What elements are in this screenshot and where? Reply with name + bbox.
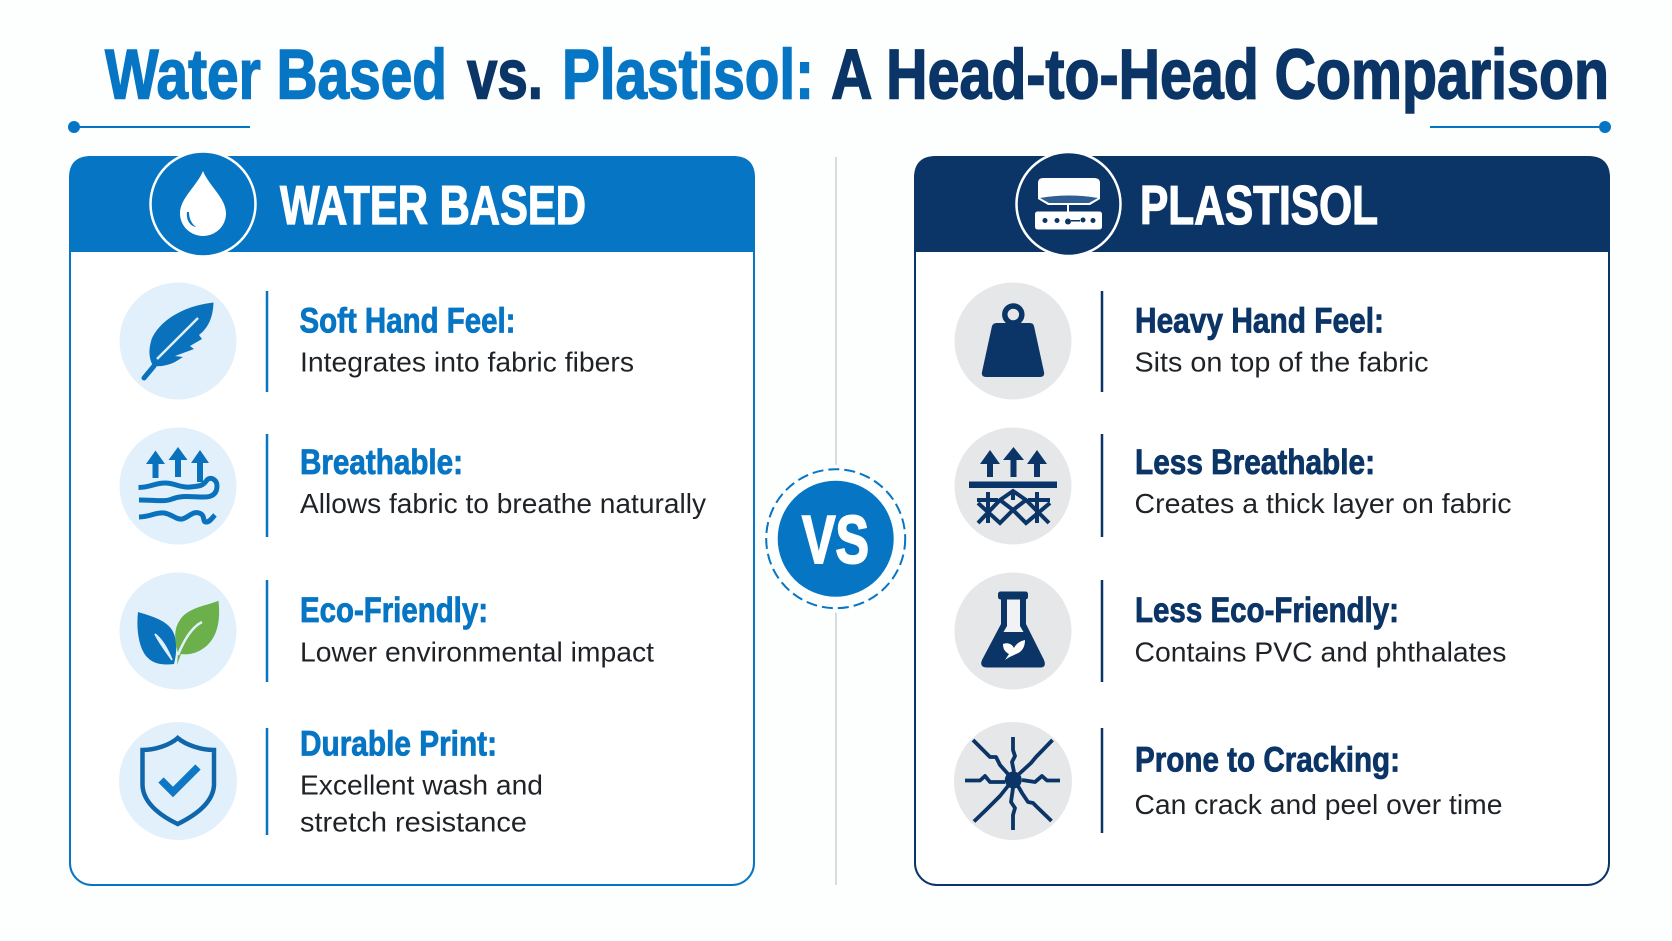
panel: plastisol: [914, 152, 1610, 885]
icon: weight: [982, 306, 1044, 377]
text: durable print: Durable Print:: [300, 725, 497, 764]
text: breathable: [300, 443, 706, 519]
icon: blocked breathing mesh: [969, 447, 1057, 523]
text: heavy hand feel: Sits on top of the fabric: [1134, 347, 1429, 378]
row: less eco-friendly: [954, 572, 1506, 690]
text: durable print: stretch resistance: [300, 807, 527, 838]
title: vs.: [467, 34, 543, 114]
header: plastisol: PLASTISOL: [1140, 174, 1378, 236]
icon: water drop: [180, 171, 226, 236]
row: eco-friendly: [120, 572, 654, 690]
vs badge: [762, 465, 910, 613]
row: durable print: [119, 722, 543, 840]
text: soft hand feel: [300, 302, 634, 378]
title rule right: [1430, 121, 1611, 133]
icon: shield check: [142, 738, 214, 824]
text: less eco-friendly: Contains PVC and phthalates: [1134, 637, 1506, 668]
text: eco-friendly: Lower environmental impact: [300, 637, 654, 668]
header: water based: WATER BASED: [280, 174, 586, 236]
title: [105, 34, 1609, 114]
text: durable print: Excellent wash and: [300, 770, 543, 801]
text: prone to cracking: [1134, 741, 1502, 820]
icon: breathable waves: [138, 447, 217, 522]
icon: feather: [144, 302, 214, 378]
header: plastisol: [914, 152, 1610, 256]
text: heavy hand feel: [1134, 302, 1429, 378]
panel: water based: [69, 152, 755, 885]
icon: flask: [981, 592, 1045, 668]
text: less breathable: Creates a thick layer on fabric: [1134, 488, 1512, 519]
icon: leaves: [137, 601, 219, 665]
row: less breathable: [954, 428, 1512, 544]
row: soft hand feel: [120, 282, 634, 400]
text: soft hand feel: Integrates into fabric fibers: [300, 347, 634, 378]
row: breathable: [120, 428, 706, 544]
text: less eco-friendly: [1134, 591, 1506, 668]
icon: screen printer: [1035, 178, 1102, 230]
text: eco-friendly: Eco-Friendly:: [300, 591, 488, 630]
text: less breathable: [1134, 443, 1512, 519]
text: less eco-friendly: Less Eco-Friendly:: [1135, 591, 1399, 630]
row: heavy hand feel: [954, 282, 1429, 400]
text: durable print: [300, 725, 543, 838]
text: prone to cracking: Can crack and peel over time: [1134, 789, 1502, 820]
text: breathable: Allows fabric to breathe naturally: [300, 488, 706, 519]
icon: cracks: [965, 737, 1060, 830]
vs badge: VS: [802, 502, 869, 578]
title rule left: [68, 121, 250, 133]
text: heavy hand feel: Heavy Hand Feel:: [1135, 302, 1384, 341]
text: prone to cracking: Prone to Cracking:: [1135, 741, 1400, 780]
title: Plastisol:: [562, 34, 814, 114]
row: prone to cracking: [954, 722, 1502, 840]
text: eco-friendly: [300, 591, 654, 668]
header: water based: [69, 152, 755, 256]
text: soft hand feel: Soft Hand Feel:: [300, 302, 516, 341]
text: breathable: Breathable:: [300, 443, 463, 482]
title: Water Based: [105, 34, 447, 114]
text: less breathable: Less Breathable:: [1135, 443, 1375, 482]
